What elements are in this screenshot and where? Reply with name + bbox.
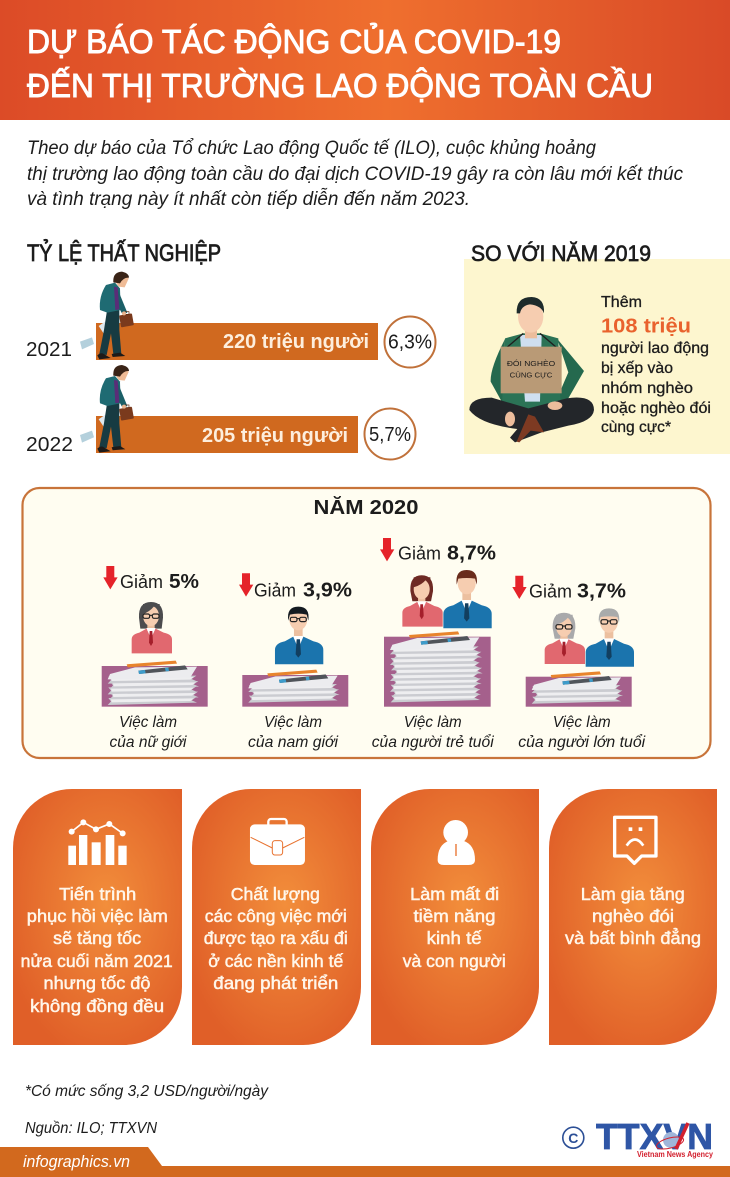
decline label: Giảm xyxy=(254,581,296,601)
card text xyxy=(565,884,701,948)
caption xyxy=(518,714,646,751)
caption: của người trẻ tuổi xyxy=(372,733,494,751)
card text xyxy=(204,884,348,993)
card text: Chất lượng xyxy=(231,884,320,904)
card text: nhưng tốc độ xyxy=(44,973,150,993)
icon: man xyxy=(275,607,323,664)
panel: compared with 2019 xyxy=(464,241,730,454)
icon: down arrow xyxy=(239,573,253,597)
icon: down arrow xyxy=(103,566,118,589)
card text xyxy=(403,884,506,971)
caption: Việc làm xyxy=(553,714,611,731)
icon: sad speech bubble xyxy=(615,817,656,863)
caption xyxy=(110,714,187,751)
card text: sẽ tăng tốc xyxy=(53,928,141,948)
intro text xyxy=(27,137,683,210)
website: infographics.vn xyxy=(23,1152,130,1171)
panel: job quality card xyxy=(192,789,361,1045)
text: 108 million workers: người lao động xyxy=(601,340,709,357)
card text: ở các nền kinh tế xyxy=(208,951,344,971)
icon: tall paper stack xyxy=(384,631,491,707)
year 2022: 2022 xyxy=(26,433,73,456)
group: women's jobs xyxy=(102,566,208,751)
title xyxy=(27,23,653,104)
intro text: và tình trạng này ít nhất còn tiếp diễn đến năm 2023. xyxy=(27,187,470,210)
copyright mark: C xyxy=(568,1130,578,1146)
copyright mark xyxy=(563,1127,584,1148)
panel: recovery card xyxy=(13,789,182,1045)
icon: briefcase xyxy=(250,819,305,865)
icon: paper stack xyxy=(242,670,348,707)
rate circle 2022 xyxy=(364,408,416,460)
intro text: thị trường lao động toàn cầu do đại dịch COVID-19 gây ra còn lâu mới kết thúc xyxy=(27,163,683,185)
card text: nửa cuối năm 2021 xyxy=(21,951,173,971)
panel: year 2020 xyxy=(22,488,710,758)
rate circle 2022: 5,7% xyxy=(369,424,411,446)
icon: jobless man 2021 xyxy=(80,272,134,359)
text: 108 million workers: nhóm nghèo xyxy=(601,380,693,397)
card text: Tiến trình xyxy=(59,884,136,904)
decline label xyxy=(120,571,199,593)
icon: seated poor person with sign: CÙNG CỰC xyxy=(510,371,553,380)
caption: Việc làm xyxy=(119,714,177,731)
icon: jobless man 2022 xyxy=(80,365,134,453)
caption xyxy=(372,714,494,751)
decline label: 3,9% xyxy=(303,580,352,602)
decline label: Giảm xyxy=(529,582,572,602)
globe and red V accent xyxy=(655,1123,688,1151)
card text xyxy=(21,884,173,1016)
caption xyxy=(248,714,338,751)
year 2021: 2021 xyxy=(26,338,72,361)
title: ĐẾN THỊ TRƯỜNG LAO ĐỘNG TOÀN CẦU xyxy=(27,67,653,104)
wordmark: TTXVN xyxy=(596,1116,713,1157)
panel: lost potential card xyxy=(371,789,539,1045)
rate circle 2021: 6,3% xyxy=(388,332,432,354)
icon: down arrow xyxy=(512,576,527,599)
rate circle 2021 xyxy=(384,316,436,368)
card text: các công việc mới xyxy=(205,906,347,926)
decline label: 8,7% xyxy=(447,542,496,564)
caption: của nam giới xyxy=(248,734,338,751)
icon: down arrow xyxy=(380,538,394,561)
card text: và con người xyxy=(403,951,506,971)
bar 2022 xyxy=(96,416,358,453)
icon: paper stack xyxy=(526,671,632,707)
card text: nghèo đói xyxy=(592,906,674,926)
decline label: Giảm xyxy=(120,572,163,592)
icon: older woman and man xyxy=(545,608,634,667)
caption: của người lớn tuổi xyxy=(518,733,646,751)
logo: TTXVN xyxy=(563,1116,713,1159)
icon: chart xyxy=(68,819,127,865)
footnote: *Có mức sống 3,2 USD/người/ngày xyxy=(25,1083,269,1100)
card text: không đồng đều xyxy=(30,996,164,1016)
caption: Việc làm xyxy=(404,714,462,731)
decline label: 3,7% xyxy=(577,581,626,603)
card text: tiềm năng xyxy=(414,906,496,926)
source: Nguồn: ILO; TTXVN xyxy=(25,1120,158,1137)
text: 108 million workers xyxy=(601,294,711,436)
decline label xyxy=(398,542,496,564)
icon: person xyxy=(438,820,475,865)
icon: paper stack xyxy=(102,661,208,707)
panel background xyxy=(464,259,730,454)
heading: compared with 2019: SO VỚI NĂM 2019 xyxy=(471,241,651,266)
caption: Việc làm xyxy=(264,714,322,731)
icon: young woman and man xyxy=(402,570,492,628)
heading: year 2020: NĂM 2020 xyxy=(314,496,418,519)
panel: inequality card xyxy=(549,789,717,1045)
text: 108 million workers: bị xếp vào xyxy=(601,360,673,377)
text: 108 million workers: Thêm xyxy=(601,294,642,311)
caption: của nữ giới xyxy=(110,734,187,751)
card text: đang phát triển xyxy=(213,973,338,993)
card text: được tạo ra xấu đi xyxy=(204,928,348,948)
title: DỰ BÁO TÁC ĐỘNG CỦA COVID-19 xyxy=(27,23,561,60)
group: men's jobs xyxy=(239,573,352,751)
card text: Làm mất đi xyxy=(410,884,499,904)
tagline: Vietnam News Agency xyxy=(637,1150,713,1159)
group: youth jobs xyxy=(372,538,496,751)
icon: woman xyxy=(132,602,172,653)
bar 2021 xyxy=(96,323,378,360)
icon: seated poor person with sign xyxy=(469,297,594,442)
icon: seated poor person with sign: ĐÓI NGHÈO xyxy=(507,359,556,368)
heading: unemployment rate: TỶ LỆ THẤT NGHIỆP xyxy=(27,238,221,267)
decline label: 5% xyxy=(169,571,199,593)
card text: kinh tế xyxy=(427,928,482,948)
footer bar xyxy=(0,1147,730,1177)
bar label 2022: 205 triệu người xyxy=(202,425,348,447)
bar label 2021: 220 triệu người xyxy=(223,331,369,353)
decline label xyxy=(254,580,352,602)
text: 108 million workers: cùng cực* xyxy=(601,419,671,436)
card text: phục hồi việc làm xyxy=(27,906,168,926)
intro text: Theo dự báo của Tổ chức Lao động Quốc tế (ILO), cuộc khủng hoảng xyxy=(27,137,596,159)
card text: Làm gia tăng xyxy=(581,884,685,904)
decline label xyxy=(529,581,626,603)
text: 108 million workers: hoặc nghèo đói xyxy=(601,400,711,417)
header banner xyxy=(0,0,730,120)
panel frame xyxy=(22,488,710,758)
decline label: Giảm xyxy=(398,543,441,563)
panel: unemployment 2021 xyxy=(26,272,436,368)
panel: unemployment 2022 xyxy=(26,365,416,460)
text: 108 million workers: 108 triệu xyxy=(601,316,691,338)
group: older workers jobs xyxy=(512,576,646,751)
card text: và bất bình đẳng xyxy=(565,927,701,948)
